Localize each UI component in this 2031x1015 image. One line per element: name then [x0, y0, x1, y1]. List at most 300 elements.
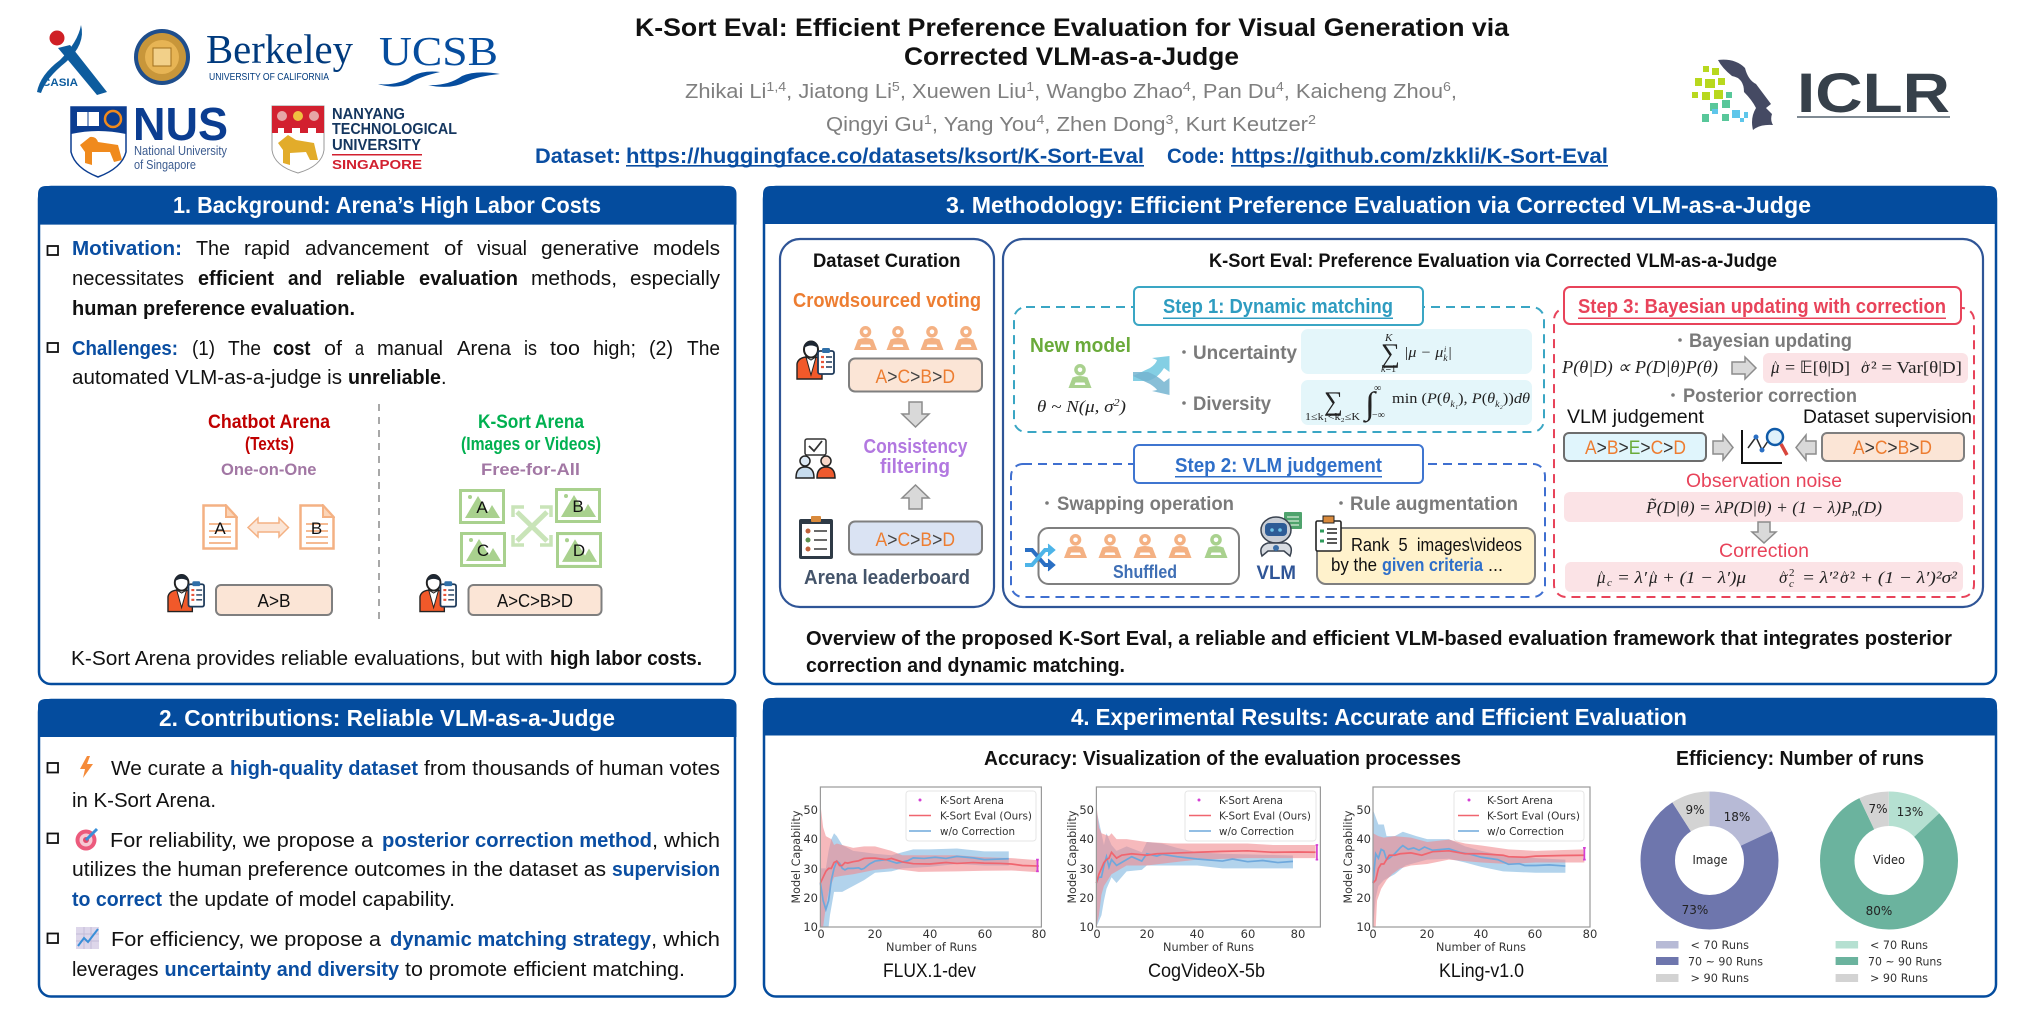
Chatbot Arena diagram: One-on-One: [221, 460, 316, 479]
step 1: dynamic matching: New model: [1030, 335, 1131, 357]
Bayesian updating: ^: [1773, 359, 1779, 371]
text block: motivation: visual: [477, 238, 527, 260]
icon: image B: B: [572, 497, 584, 516]
caption: overview: correction and dynamic matching.: [806, 655, 1125, 677]
icon: cross arrows: [513, 507, 551, 545]
K-Sort Arena diagram: Free-for-All: [481, 460, 580, 479]
ranking box: crowd: A>C>B>D: [876, 367, 955, 388]
x axis: 20: [868, 927, 882, 941]
donut: video: 13%: [1897, 805, 1923, 819]
icon: image D: D: [573, 541, 585, 560]
text block: motivation: reliable: [336, 268, 405, 290]
caption: overview: Overview of the proposed K-Sort Eval, a reliable and efficient VLM-based evaluation framework that integrates posterior: [806, 628, 1952, 650]
y axis: 50: [1079, 803, 1094, 817]
y axis: 10: [1356, 920, 1371, 934]
criterion: diversity: Diversity: [1193, 394, 1271, 415]
x axis: 0: [1369, 927, 1377, 941]
Bayesian updating: ^: [1863, 359, 1869, 371]
authors: [685, 79, 1457, 136]
logo: NTU wordmark: UNIVERSITY: [332, 137, 421, 154]
criterion: diversity: 1≤k₁<k₂≤K: [1305, 412, 1361, 423]
formula: correction: + (1 − λ′)²σ²: [1860, 568, 1958, 587]
text block: motivation: human preference evaluation.: [72, 298, 355, 320]
rule augmentation: Rule augmentation: [1350, 494, 1518, 515]
donut: video: Video: [1873, 853, 1905, 867]
icon: image C: [462, 534, 504, 566]
logo: NTU wordmark: SINGAPORE: [332, 157, 422, 172]
links: dataset and code: https://huggingface.co/datasets/ksort/K-Sort-Eval: [626, 145, 1144, 168]
criterion: diversity: [1182, 380, 1532, 425]
text block: challenges: Challenges:: [72, 338, 178, 360]
icon: shuffled models: [1064, 534, 1228, 558]
criterion: diversity: k₂: [1495, 399, 1503, 409]
text block: challenges: too: [550, 338, 580, 360]
icon: robot VLM: VLM: [1256, 563, 1296, 584]
y axis: 20: [803, 891, 818, 905]
y axis: 10: [803, 920, 818, 934]
step 2: VLM judgement: [1011, 445, 1545, 597]
icon: document B: [300, 506, 334, 548]
y axis: [1341, 803, 1371, 934]
text block: motivation: efficient: [198, 268, 274, 290]
step 3 label: Step 3: Bayesian updating with correction: [1578, 296, 1946, 318]
ranking box: dataset: A>C>B>D: [1853, 438, 1932, 459]
logo: Berkeley wordmark: UNIVERSITY OF CALIFORNIA: [209, 72, 329, 83]
authors: , Zhen Dong: [1044, 114, 1165, 136]
legend: image: > 90 Runs: [1690, 971, 1749, 985]
text block: motivation: especially: [630, 268, 720, 290]
bullet: efficiency: uncertainty and diversity: [164, 959, 400, 981]
formula: correction: ^: [1781, 569, 1787, 581]
authors: Zhikai Li: [685, 81, 759, 103]
Posterior correction: VLM judgement: [1567, 407, 1705, 428]
text block: challenges: a: [355, 338, 365, 360]
x axis: Number of Runs: [1163, 940, 1254, 954]
panel: dataset curation: Dataset Curation: [813, 251, 960, 272]
logo: CASIA: [37, 25, 107, 95]
title: K-Sort Eval: Efficient Preference Evaluation for Visual Generation via: [635, 14, 1510, 42]
bullet: reliability: supervision: [612, 859, 720, 881]
logo: NUS wordmark: NUS: [133, 98, 228, 150]
authors: 4: [1183, 79, 1191, 94]
bullet: efficiency: to promote efficient matching.: [405, 959, 685, 981]
criterion: diversity: ∞: [1374, 383, 1381, 394]
links: dataset and code: [535, 145, 1608, 168]
icon: document B: B: [311, 519, 322, 538]
icon: discussion: [796, 439, 835, 478]
step 1: dynamic matching: 2: [1114, 397, 1120, 409]
authors: 1,4: [766, 79, 786, 94]
text block: challenges: is: [524, 338, 537, 360]
y axis: Model Capability: [1341, 810, 1355, 904]
criterion: uncertainty: k: [1443, 353, 1449, 363]
arrow: up: [902, 485, 929, 509]
authors: 6: [1443, 79, 1451, 94]
chart: FLUX.1-dev: FLUX.1-dev: [883, 961, 976, 982]
bullet: reliability: [48, 829, 720, 911]
arrow: down: [902, 402, 929, 427]
step 2 label: [1134, 445, 1423, 483]
x axis: 80: [1583, 927, 1597, 941]
icon: crowd: [854, 326, 978, 350]
bullet: reliability: the update of model capability.: [169, 889, 455, 911]
formula: correction: = λ′: [1617, 568, 1647, 587]
chart: KLing-v1.0: KLing-v1.0: [1439, 961, 1524, 982]
authors: , Kurt Keutzer: [1173, 114, 1308, 136]
formula: correction: σ: [1840, 568, 1849, 587]
ranking box A>C>B>D: A>C>B>D: [497, 591, 573, 611]
text block: challenges: The: [228, 338, 261, 360]
bullet: efficiency: leverages: [72, 959, 158, 981]
y axis: 30: [803, 862, 818, 876]
Posterior correction: Posterior correction: [1683, 386, 1857, 407]
formula: correction: σ: [1779, 568, 1788, 587]
y axis: 50: [803, 803, 818, 817]
panel 4: experimental results: [763, 698, 1997, 996]
chart: CogVideoX-5b: [1065, 787, 1320, 982]
rule augmentation: Rank 5 images\videos: [1351, 535, 1522, 555]
legend: K-Sort Eval (Ours): [940, 810, 1032, 822]
ranking box: VLM: [1564, 433, 1706, 461]
panel 4 heading: [763, 698, 1997, 736]
text block: motivation: [48, 238, 720, 320]
criterion: uncertainty: [1182, 329, 1532, 375]
bullet: reliability: , which: [652, 830, 720, 852]
donut: image: [1658, 803, 1761, 917]
y axis: 10: [1079, 920, 1094, 934]
text block: challenges: (2): [649, 338, 673, 360]
donut: image: 73%: [1682, 903, 1708, 917]
authors: 1: [924, 112, 932, 127]
authors: Qingyi Gu: [826, 114, 915, 136]
text block: motivation: The: [196, 238, 230, 260]
Chatbot Arena diagram: (Texts): [245, 434, 294, 454]
text block: motivation: and: [288, 268, 322, 290]
formula: correction: ^: [1651, 569, 1657, 581]
x axis: [1369, 927, 1597, 954]
formula: correction: [1565, 562, 1963, 592]
ranking box: dataset: [1822, 433, 1964, 461]
formula: correction: c: [1789, 578, 1794, 590]
criterion: diversity: ),: [1458, 391, 1472, 407]
chart: FLUX.1-dev: [789, 787, 1046, 982]
formula: correction: = λ′²: [1802, 568, 1839, 587]
authors: 5: [892, 79, 900, 94]
authors: , Yang You: [932, 114, 1036, 136]
icon: document A: [204, 506, 236, 548]
panel: dataset curation: Arena leaderboard: [804, 567, 970, 589]
Posterior correction: Observation noise: [1686, 471, 1842, 492]
swapping operation: Shuffled: [1113, 562, 1177, 582]
criterion: uncertainty: |: [1448, 345, 1452, 361]
panel: dataset curation: [780, 239, 994, 607]
logo: ICLR: ICLR: [1797, 61, 1950, 124]
text block: challenges: [48, 338, 720, 389]
text block: motivation: rapid: [244, 238, 290, 260]
authors: , Kaicheng Zhou: [1284, 81, 1443, 103]
panel 1: background: [38, 186, 736, 684]
K-Sort Arena diagram: K-Sort Arena: [478, 412, 584, 433]
logo: Berkeley seal: [134, 29, 190, 85]
arrow: right: [1732, 357, 1756, 379]
Bayesian updating: = 𝔼[θ|D]: [1785, 358, 1850, 377]
ranking box: leaderboard: [849, 522, 982, 554]
Bayesian updating: ² = Var[θ|D]: [1871, 358, 1962, 377]
authors: , Jiatong Li: [786, 81, 892, 103]
y axis: [1065, 803, 1094, 934]
bullet: dataset: We curate a: [111, 758, 224, 780]
donut: video: 80%: [1866, 904, 1892, 918]
y axis: 50: [1356, 803, 1371, 817]
x axis: 40: [1474, 927, 1488, 941]
step 1 label: Step 1: Dynamic matching: [1163, 296, 1393, 318]
criterion: uncertainty: k=1: [1381, 364, 1396, 375]
legend: image: [1656, 938, 1763, 985]
ranking box A>B: A>B: [258, 591, 290, 611]
criterion: diversity: dθ: [1514, 391, 1531, 407]
text block: challenges: cost: [273, 338, 311, 360]
swapping operation: Swapping operation: [1057, 494, 1234, 515]
criterion: diversity: min (P(θ: [1392, 391, 1450, 407]
bullet: efficiency: , which: [651, 929, 720, 951]
y axis: 40: [1079, 832, 1094, 846]
legend: [1185, 791, 1316, 841]
text block: motivation: models: [653, 238, 720, 260]
y axis: 30: [1356, 862, 1371, 876]
panel 1 heading: [38, 186, 736, 225]
y axis: 30: [1079, 862, 1094, 876]
text block: challenges: The: [687, 338, 720, 360]
text block: motivation: of: [444, 238, 463, 260]
icon: voter: [797, 341, 834, 379]
logo: NUS wordmark: National University: [134, 143, 227, 158]
panel 2: contributions: [38, 699, 736, 996]
legend: w/o Correction: [940, 826, 1015, 838]
logo: NTU wordmark: [332, 106, 457, 172]
criterion: uncertainty: i: [1444, 345, 1446, 354]
logo: ICLR: [1692, 60, 1950, 130]
legend: video: 70 ~ 90 Runs: [1868, 954, 1942, 968]
formula: correction: 2: [1789, 567, 1794, 579]
ranking box: crowd: [849, 358, 982, 392]
formula: correction: ²: [1850, 568, 1855, 587]
x axis: [817, 927, 1046, 954]
panel: K-Sort Eval framework: K-Sort Eval: Preference Evaluation via Corrected VLM-as-a-Judge: [1209, 251, 1777, 272]
links: dataset and code: https://github.com/zkkli/K-Sort-Eval: [1231, 145, 1608, 168]
criterion: uncertainty: Uncertainty: [1193, 343, 1297, 364]
logo: NUS wordmark: [133, 98, 228, 172]
caption: overview: [806, 628, 1952, 677]
icon: chart: [76, 927, 99, 949]
legend: image: 70 ~ 90 Runs: [1688, 954, 1763, 968]
rule augmentation: ...: [1488, 555, 1503, 575]
y axis: Model Capability: [1065, 810, 1079, 904]
bullet: dataset: high-quality dataset: [230, 758, 418, 780]
text block: motivation: methods,: [531, 268, 617, 290]
ranking box A>C>B>D: [468, 585, 602, 615]
authors: 4: [1036, 112, 1044, 127]
icon: checklist: [1316, 516, 1341, 551]
arrow: down: [1752, 522, 1776, 543]
legend: w/o Correction: [1487, 826, 1564, 838]
formula: correction: + (1 − λ′)μ: [1662, 568, 1746, 587]
text: conclusion: K-Sort Arena provides reliable evaluations, but with: [71, 648, 543, 670]
title: Corrected VLM-as-a-Judge: [904, 43, 1239, 71]
x axis: [1093, 927, 1305, 954]
text block: challenges: high;: [593, 338, 636, 360]
y axis: [789, 803, 818, 934]
arrow: right: [1713, 435, 1733, 460]
logo: NUS wordmark: of Singapore: [134, 157, 196, 172]
icon: robot VLM: [1256, 512, 1302, 584]
bullet: reliability: utilizes the human preference outcomes in the dataset as: [72, 859, 606, 881]
donut: video: 7%: [1868, 802, 1888, 816]
x axis: 20: [1140, 927, 1154, 941]
authors: , Wangbo Zhao: [1034, 81, 1183, 103]
icon: target: [76, 829, 97, 850]
Bayesian updating: μ: [1770, 358, 1780, 377]
text block: motivation: evaluation: [419, 268, 518, 290]
formula: correction: μ: [1648, 568, 1658, 587]
formula: observation noise: P̃(D|θ) = λP(D|θ) + (1 − λ)P: [1646, 498, 1845, 517]
text block: challenges: automated VLM-as-a-judge is: [72, 367, 342, 389]
legend: K-Sort Eval (Ours): [1219, 810, 1311, 822]
K-Sort Arena diagram: [420, 412, 602, 615]
criterion: diversity: P(θ: [1472, 391, 1495, 407]
divider: [378, 404, 380, 622]
x axis: Number of Runs: [1436, 940, 1526, 954]
text block: challenges: (1): [192, 338, 215, 360]
arrow: left: [1796, 435, 1816, 460]
authors: , Pan Du: [1191, 81, 1276, 103]
text block: motivation: necessitates: [72, 268, 184, 290]
logo: UCSB: UCSB: [379, 28, 498, 74]
legend: [906, 791, 1036, 841]
x axis: 80: [1291, 927, 1305, 941]
x axis: 60: [1528, 927, 1542, 941]
panel 3 heading: 3. Methodology: Efficient Preference Evaluation via Corrected VLM-as-a-Judge: [946, 192, 1811, 218]
authors: 4: [1276, 79, 1284, 94]
logo: NTU wordmark: NANYANG: [332, 106, 405, 123]
ranking box: leaderboard: A>C>B>D: [876, 530, 955, 551]
x axis: Number of Runs: [886, 940, 977, 954]
step 3: Bayesian updating with correction: [1554, 287, 1974, 597]
bullet: efficiency: For efficiency, we propose a: [111, 929, 382, 951]
icon: image C: C: [477, 541, 489, 560]
formula: observation noise: (D): [1858, 498, 1882, 517]
donut: image: 18%: [1724, 810, 1750, 824]
bullet: efficiency: [48, 927, 720, 981]
icon: document A: A: [214, 519, 226, 538]
step 1: dynamic matching: θ ~ N(μ, σ: [1037, 397, 1105, 416]
legend: video: < 70 Runs: [1870, 938, 1928, 952]
authors: ,: [1451, 81, 1457, 103]
bullet: reliability: For reliability, we propose a: [110, 830, 374, 852]
panel 4 heading: 4. Experimental Results: Accurate and Efficient Evaluation: [1071, 704, 1687, 730]
title: [635, 14, 1510, 71]
panel 3 heading: [763, 186, 1997, 224]
text block: challenges: .: [441, 367, 447, 389]
text block: challenges: Arena: [457, 338, 512, 360]
formula: correction: ^: [1842, 569, 1848, 581]
x axis: 0: [817, 927, 825, 941]
formula: observation noise: n: [1852, 507, 1858, 519]
ranking box: VLM: A>B>E>C>D: [1585, 438, 1686, 459]
icon: double arrow: [248, 518, 288, 537]
donut: video: [1837, 802, 1941, 918]
logo: NTU wordmark: TECHNOLOGICAL: [332, 121, 457, 138]
criterion: diversity: )): [1503, 391, 1514, 407]
ranking box A>B: [216, 585, 332, 615]
icon: image A: A: [476, 498, 488, 517]
formula: observation noise: [1564, 492, 1963, 522]
bullet: reliability: to correct: [72, 889, 162, 911]
K-Sort Arena diagram: (Images or Videos): [461, 434, 601, 454]
text: consistency filtering: filtering: [880, 456, 950, 478]
legend: w/o Correction: [1219, 826, 1294, 838]
text block: challenges: of: [324, 338, 342, 360]
criterion: uncertainty: |μ − μ: [1404, 345, 1441, 361]
rule augmentation: given criteria: [1382, 555, 1484, 575]
heading: efficiency: Efficiency: Number of runs: [1676, 748, 1924, 770]
icon: image A: [460, 490, 504, 522]
formula: correction: c: [1607, 577, 1612, 589]
legend: K-Sort Arena: [1487, 795, 1553, 807]
step 3 label: [1564, 287, 1961, 324]
bullet: dataset: from thousands of human votes: [424, 758, 720, 780]
legend: video: [1836, 938, 1942, 985]
x axis: 0: [1093, 927, 1101, 941]
icon: voter: [420, 574, 456, 612]
criterion: uncertainty: ∑: [1381, 338, 1400, 368]
legend: image: < 70 Runs: [1690, 938, 1749, 952]
y axis: 40: [1356, 832, 1371, 846]
Bayesian updating: P(θ|D) ∝ P(D|θ)P(θ): [1561, 357, 1718, 378]
criterion: diversity: −∞: [1372, 410, 1385, 421]
criterion: uncertainty: K: [1384, 332, 1393, 344]
y axis: Model Capability: [789, 810, 803, 904]
icon: bolt: [80, 756, 93, 778]
icon: new model: [1068, 364, 1092, 388]
icon: leaderboard: [799, 516, 833, 559]
swapping operation: [1025, 494, 1239, 584]
formula: correction: ^: [1599, 569, 1605, 581]
panel 1 heading: 1. Background: Arena’s High Labor Costs: [173, 192, 601, 218]
chart: CogVideoX-5b: CogVideoX-5b: [1148, 961, 1265, 982]
text block: challenges: manual: [377, 338, 443, 360]
icon: image D: [558, 534, 600, 566]
panel: K-Sort Eval framework: [1003, 239, 1983, 607]
criterion: diversity: ∑: [1324, 386, 1343, 416]
links: dataset and code: Code:: [1167, 145, 1225, 168]
authors: 3: [1165, 112, 1173, 127]
y axis: 40: [803, 832, 818, 846]
Posterior correction: [1564, 386, 1972, 592]
donut: image: Image: [1692, 853, 1728, 867]
chart: KLing-v1.0: [1341, 787, 1597, 982]
y axis: 20: [1356, 891, 1371, 905]
step 2 label: Step 2: VLM judgement: [1175, 455, 1382, 477]
links: dataset and code: Dataset:: [535, 145, 621, 168]
Chatbot Arena diagram: Chatbot Arena: [208, 412, 330, 433]
x axis: 20: [1420, 927, 1434, 941]
donut: image: 9%: [1685, 803, 1705, 817]
logo: UCSB: [378, 28, 500, 87]
text: conclusion: high labor costs.: [550, 648, 702, 670]
bullet: reliability: posterior correction method: [382, 830, 652, 852]
panel 2 heading: [38, 699, 736, 737]
legend: [1454, 791, 1584, 841]
